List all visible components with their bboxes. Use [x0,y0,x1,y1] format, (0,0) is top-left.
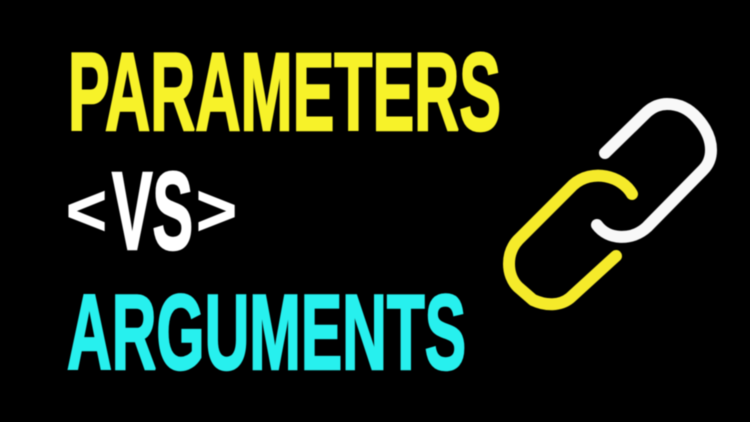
icon: chain link [509,104,711,304]
heading: VS: < [66,171,107,251]
heading: VS [66,150,237,273]
white link [597,104,711,237]
heading: VS: > [196,171,237,251]
heading: VS: VS [112,150,193,273]
yellow link [509,176,632,304]
title: ARGUMENTS: ARGUMENTS [67,272,466,392]
